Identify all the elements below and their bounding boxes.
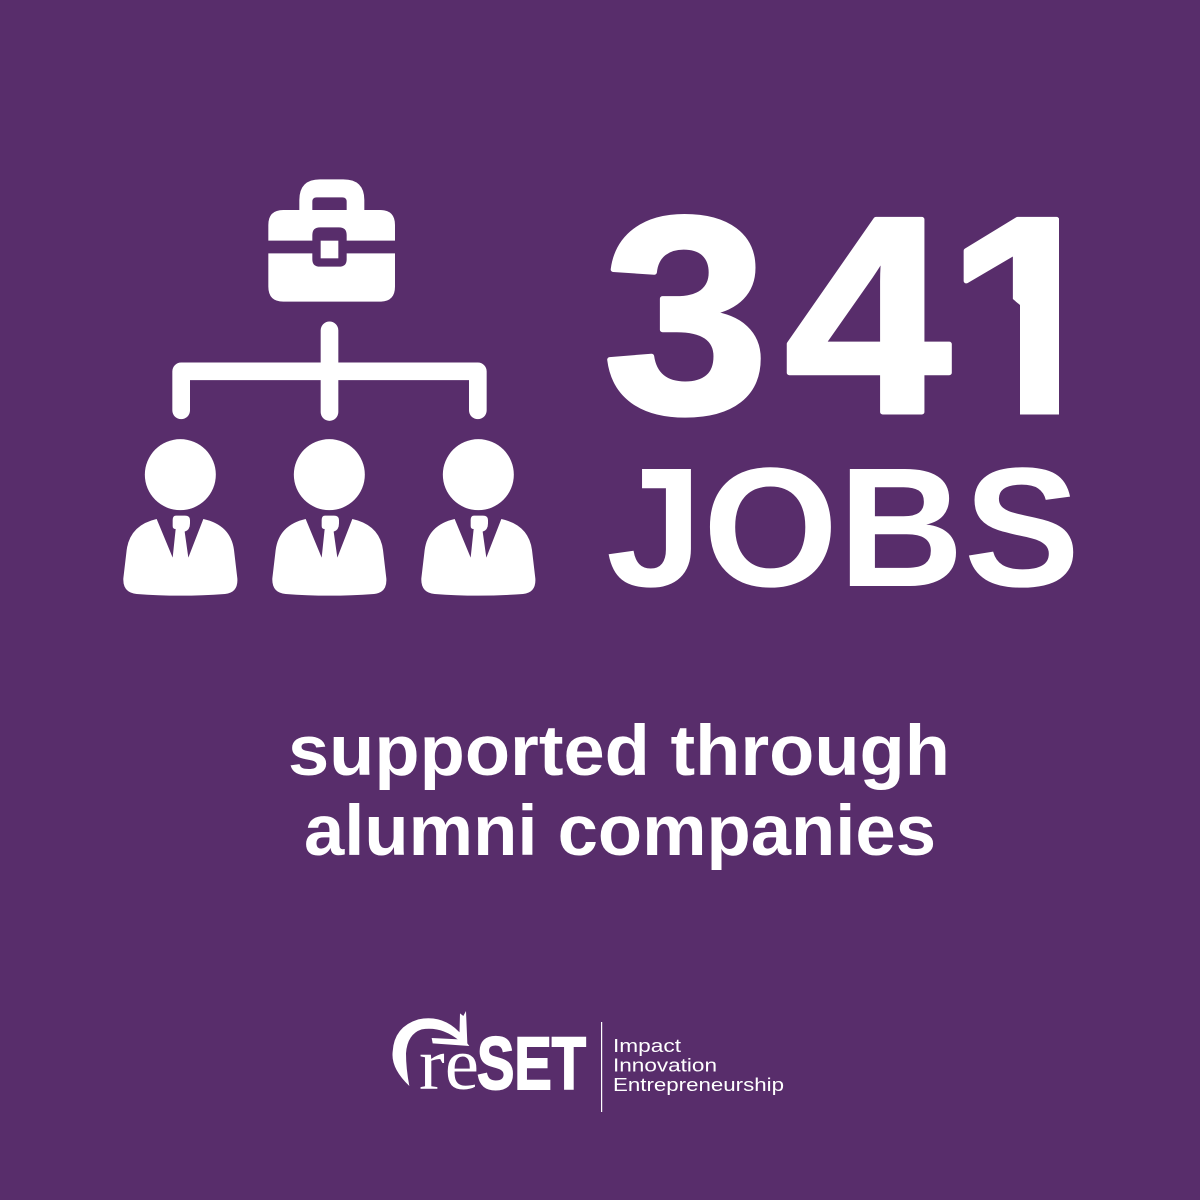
subtitle: supported through — [288, 712, 950, 791]
logo divider — [601, 1022, 602, 1112]
logo wordmark re: re — [419, 1024, 479, 1106]
icon: briefcase — [268, 179, 395, 302]
icon: connector lines — [181, 330, 478, 412]
logo wordmark SET: SET — [477, 1022, 586, 1105]
logo tagline — [613, 1035, 784, 1095]
headline word: JOBS — [606, 433, 1080, 623]
logo tagline: Entrepreneurship — [613, 1074, 784, 1095]
subtitle: alumni companies — [304, 792, 936, 871]
headline number: 341 — [603, 159, 1112, 472]
logo: reSET — [392, 1011, 784, 1112]
icon: person right — [421, 439, 535, 596]
icon: person centre — [272, 439, 386, 596]
logo tagline: Impact — [613, 1035, 681, 1056]
infographic canvas — [123, 179, 1074, 1112]
subtitle — [288, 712, 950, 871]
icon: person left — [123, 439, 237, 596]
logo swoosh arrow — [392, 1011, 469, 1086]
icon: job hierarchy — [123, 179, 535, 596]
logo tagline: Innovation — [613, 1054, 717, 1076]
